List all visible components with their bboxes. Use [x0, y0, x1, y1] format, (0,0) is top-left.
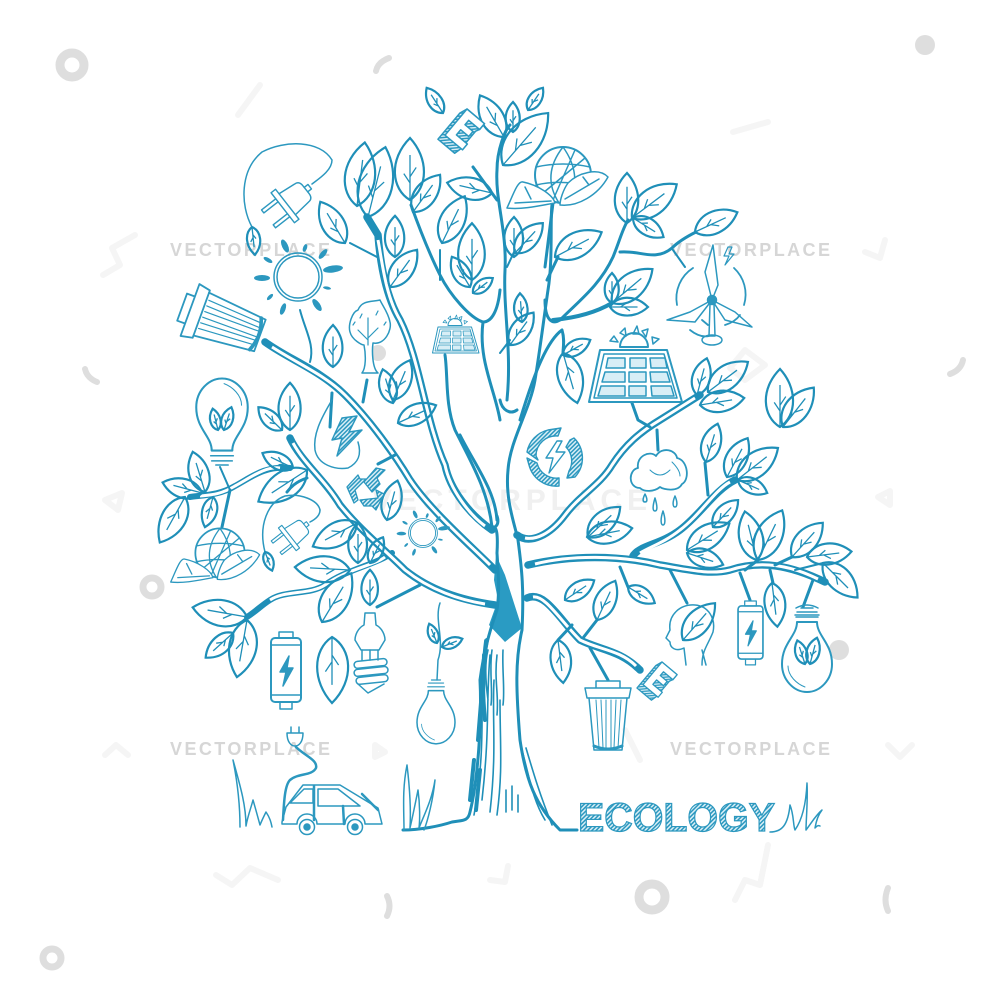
- icon: plug with cord, left: [261, 495, 320, 572]
- icon: battery, left: [271, 632, 301, 709]
- grass, left: [233, 760, 272, 827]
- background watermark and decoration: VECTORPLACE: [670, 240, 830, 260]
- icon: small sun, centre: [397, 510, 450, 556]
- background watermark and decoration: VECTORPLACE: [170, 739, 330, 759]
- icon: lightning bulb: [315, 400, 362, 468]
- grass, centre: [404, 765, 435, 830]
- grass, right: [770, 783, 822, 832]
- tree trunk: [403, 470, 577, 830]
- icon: rain cloud: [631, 450, 687, 525]
- icon: globe with leaves, top: [507, 147, 608, 208]
- icon: trash can, top left: [173, 281, 269, 361]
- tree branches: [190, 125, 825, 680]
- icon: light bulb with leaves, right: [782, 605, 832, 692]
- icon: recycling triangle: [347, 468, 385, 510]
- background watermark and decoration: VECTORPLACE: [670, 739, 830, 759]
- icon: head with leaf: [666, 595, 723, 665]
- icon: sprout and small bulb: [417, 603, 464, 744]
- icon: large solar panel: [589, 326, 682, 402]
- icon: battery, right: [738, 601, 763, 665]
- icon: lower E block: [637, 660, 677, 702]
- leaves: [150, 84, 866, 703]
- icon: recycling energy circle: [527, 428, 582, 486]
- icon: top E block: [438, 107, 484, 156]
- icon: CFL spiral bulb: [354, 613, 388, 693]
- icon: plug with cord, top left: [244, 144, 332, 256]
- background watermark and decoration: VECTORPLACE: [372, 484, 647, 517]
- background watermark and decoration: VECTORPLACE: [170, 240, 330, 260]
- icon: small tree: [349, 300, 390, 373]
- icon: light bulb with leaves, left: [196, 378, 248, 465]
- icon: electric car with plug: [282, 727, 382, 834]
- icon: globe with leaves, left: [171, 528, 260, 582]
- title: ECOLOGY: ECOLOGY: [578, 796, 775, 840]
- icon: wind turbine: [667, 245, 752, 345]
- icon: trash can, lower: [585, 681, 631, 750]
- icon: sun, top left: [254, 238, 343, 315]
- icon: small solar panel: [432, 315, 479, 353]
